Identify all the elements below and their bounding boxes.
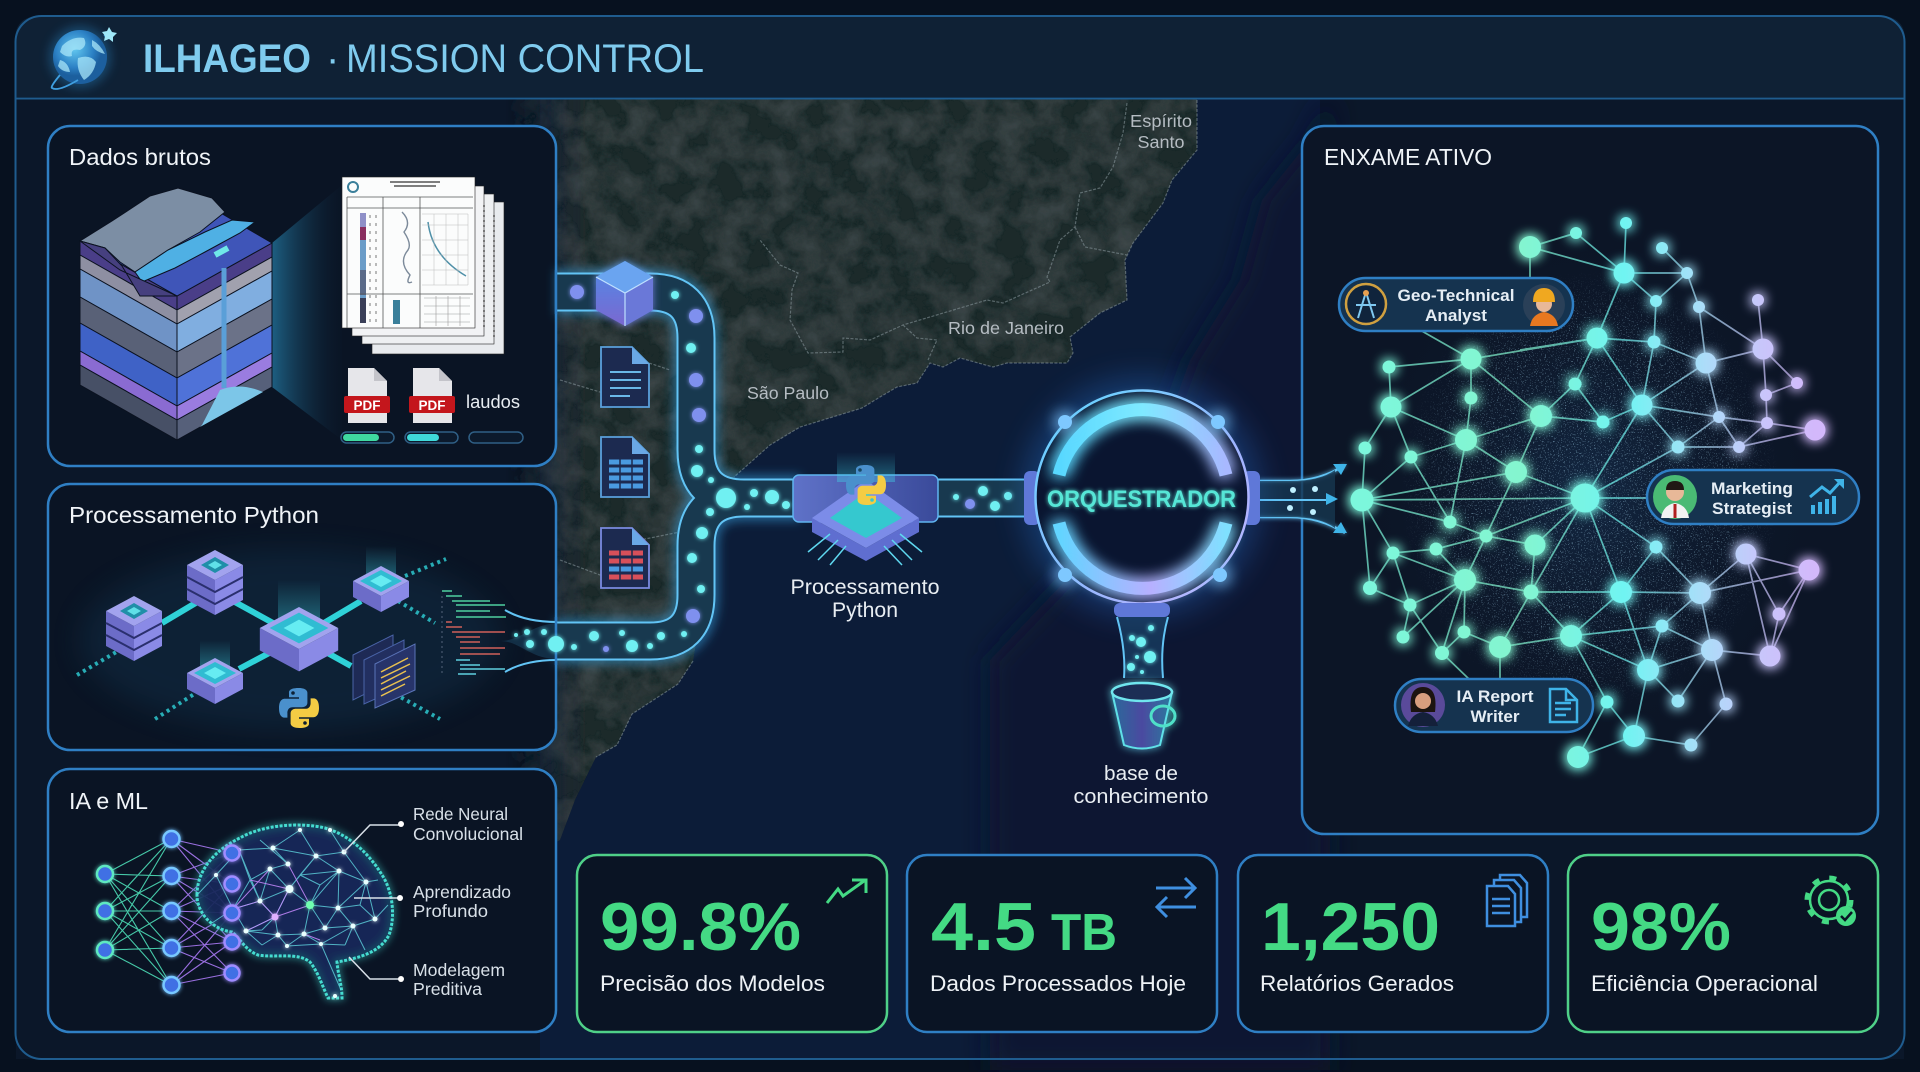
segment: chip to orchestrator <box>930 475 1040 521</box>
data particles <box>514 285 1012 652</box>
map labels <box>747 111 1192 403</box>
icon: PDF 2: PDF <box>418 398 446 413</box>
stat card: Eficiência Operacional <box>1568 855 1878 1032</box>
pill: Geo-Technical Analyst <box>1339 278 1573 331</box>
pill: Geo-Technical Analyst: Analyst <box>1425 306 1487 325</box>
icon: writer avatar <box>1401 683 1445 727</box>
map labels: São Paulo <box>747 383 829 403</box>
panel: Enxame ativo <box>1302 126 1878 834</box>
server stack 2 <box>187 550 243 615</box>
map labels: Espírito <box>1130 111 1192 131</box>
funnel to knowledge base <box>1114 603 1170 678</box>
title: ILHAGEO <box>143 37 311 81</box>
progress bars <box>341 432 523 443</box>
geology block <box>80 188 272 440</box>
map labels: Rio de Janeiro <box>948 318 1064 338</box>
network specks <box>1400 270 1780 710</box>
callout labels: Aprendizado <box>413 882 511 902</box>
server node 3 <box>353 566 409 612</box>
label: base de conhecimento: conhecimento <box>1074 785 1208 808</box>
icon: trend arrow <box>827 880 866 903</box>
icon: text document <box>601 347 649 407</box>
pill: Marketing Strategist: Strategist <box>1712 499 1792 518</box>
stat card: Dados Processados Hoje: Dados Processados Hoje <box>930 971 1186 996</box>
neural network links <box>105 839 171 985</box>
report chart detail <box>347 182 494 340</box>
heading: IA e ML: IA e ML <box>69 788 148 814</box>
icon: PDF 1 <box>344 368 390 423</box>
pill: IA Report Writer <box>1395 679 1593 732</box>
brain <box>197 825 393 998</box>
title <box>143 37 704 81</box>
stat card: Eficiência Operacional: Eficiência Operacional <box>1591 971 1818 996</box>
stat card: Eficiência Operacional: 98% <box>1591 889 1731 965</box>
label: ORQUESTRADOR: ORQUESTRADOR <box>1047 486 1236 513</box>
icon: PDF 2 <box>409 368 455 423</box>
icon: python logo <box>846 465 886 505</box>
icon: gear with check <box>1807 878 1856 926</box>
chip body <box>808 480 922 565</box>
stat card: Dados Processados Hoje <box>907 855 1217 1032</box>
stat card: Relatórios Gerados: Relatórios Gerados <box>1260 971 1454 996</box>
label: base de conhecimento: base de <box>1104 762 1178 785</box>
tube mouth in Processamento panel <box>500 623 557 659</box>
panel: Dados brutos <box>48 126 556 466</box>
icon: report document <box>1550 689 1577 722</box>
network links <box>1362 223 1815 757</box>
pill: IA Report Writer: IA Report <box>1456 687 1534 706</box>
stat card: Dados Processados Hoje: TB <box>1051 904 1117 962</box>
icon: growth chart <box>1810 479 1844 514</box>
panel: IA e ML <box>48 769 556 1032</box>
icon: strategist avatar <box>1653 475 1697 519</box>
panel: Processamento Python <box>48 484 556 750</box>
label: base de conhecimento <box>1074 762 1208 808</box>
icon: red table document <box>601 528 649 588</box>
label: Processamento Python: Python <box>832 599 898 622</box>
icon: PDF 1: PDF <box>354 398 380 413</box>
heading: Dados brutos: Dados brutos <box>69 144 211 170</box>
heading: Processamento Python: Processamento Python <box>69 502 319 528</box>
title: MISSION CONTROL <box>346 37 704 81</box>
map labels: Santo <box>1138 132 1184 152</box>
python processor chip <box>793 452 938 565</box>
stat card: Relatórios Gerados: 1,250 <box>1261 889 1440 965</box>
pill: Geo-Technical Analyst: Geo-Technical <box>1398 286 1514 305</box>
data pipeline tube <box>500 270 1040 672</box>
report sheets <box>342 177 504 354</box>
ring lamps <box>1058 415 1227 582</box>
callout labels: Profundo <box>413 901 488 921</box>
icon: table document <box>601 437 649 497</box>
orchestrator ring <box>1020 375 1264 619</box>
tube: orchestrator to swarm <box>1258 464 1347 533</box>
label: Processamento Python <box>790 576 940 622</box>
stat card: Dados Processados Hoje: 4.5 <box>931 889 1036 965</box>
server node 4 <box>187 658 243 704</box>
borehole <box>222 268 226 388</box>
icon: data cube <box>596 261 653 326</box>
callout labels: Preditiva <box>413 979 482 999</box>
light beams <box>200 546 396 670</box>
icon: python logo <box>279 688 319 728</box>
neural network nodes <box>97 831 240 993</box>
label: Processamento Python: Processamento <box>790 576 940 599</box>
pill: Marketing Strategist <box>1647 470 1859 524</box>
network nodes <box>1350 217 1826 768</box>
callout labels <box>413 804 523 999</box>
beam from block to report <box>272 185 342 440</box>
label: laudos: laudos <box>466 391 520 412</box>
code listing <box>442 591 506 676</box>
callout labels: Convolucional <box>413 824 523 844</box>
code windows <box>353 635 415 708</box>
callout lines <box>344 821 404 982</box>
icon: globe logo <box>49 26 117 89</box>
stat card: Relatórios Gerados <box>1238 855 1548 1032</box>
data links <box>77 559 446 719</box>
icon: compass <box>1346 284 1386 324</box>
pill: IA Report Writer: Writer <box>1470 707 1520 726</box>
icon: exchange arrows <box>1156 878 1196 917</box>
stat card: Precisão dos Modelos <box>577 855 887 1032</box>
title: · <box>326 37 339 81</box>
stat card: Precisão dos Modelos: 99.8% <box>600 889 801 965</box>
central chip <box>260 607 338 671</box>
lower arc <box>1059 523 1226 588</box>
upper arc <box>1059 410 1226 475</box>
callout labels: Rede Neural <box>413 804 508 824</box>
icon: document stack <box>1487 875 1527 926</box>
heading: Enxame ativo: ENXAME ATIVO <box>1324 144 1492 170</box>
server stack 1 <box>106 596 162 661</box>
stat card: Precisão dos Modelos: Precisão dos Modelos <box>600 971 825 996</box>
callout labels: Modelagem <box>413 960 505 980</box>
pill: Marketing Strategist: Marketing <box>1711 479 1793 498</box>
icon: knowledge base bucket <box>1112 683 1175 748</box>
icon: engineer avatar <box>1523 284 1565 326</box>
